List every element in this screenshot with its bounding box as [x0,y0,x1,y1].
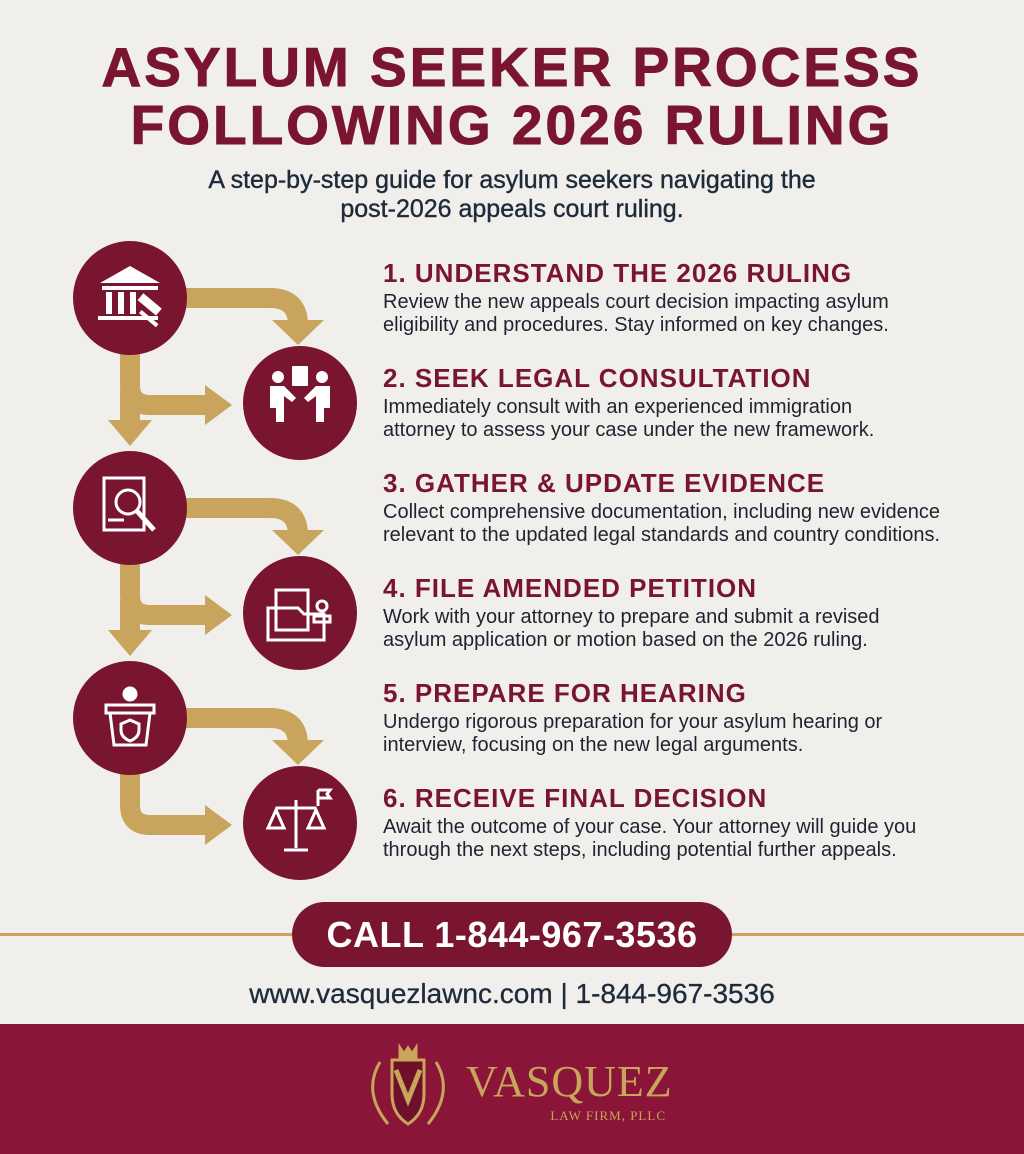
step 5 [383,678,882,756]
step 4: 4. FILE AMENDED PETITION [383,573,757,603]
title: FOLLOWING 2026 RULING [131,94,893,156]
step 3: Collect comprehensive documentation, including new evidence [383,501,940,523]
flow diagram: icons and arrows [73,241,357,880]
step 6: 6. RECEIVE FINAL DECISION [383,783,767,813]
step 6 [383,783,916,861]
step 3: 3. GATHER & UPDATE EVIDENCE [383,468,825,498]
call button: CALL 1-844-967-3536 [326,914,698,955]
step 5: interview, focusing on the new legal arguments. [383,734,803,756]
step 4: asylum application or motion based on the 2026 ruling. [383,629,868,651]
logo text: VASQUEZ [466,1057,673,1106]
call button [292,902,732,967]
icon 6: scales [243,766,357,880]
step 5: Undergo rigorous preparation for your asylum hearing or [383,711,882,733]
icon 4: folder with stamp [243,556,357,670]
step 3 [383,468,940,546]
footer with logo: LAW FIRM, PLLC [550,1108,666,1123]
step 6: through the next steps, including potential further appeals. [383,839,897,861]
step 1: 1. UNDERSTAND THE 2026 RULING [383,258,852,288]
step 2: attorney to assess your case under the new framework. [383,419,874,441]
step 5: 5. PREPARE FOR HEARING [383,678,747,708]
step 4: Work with your attorney to prepare and submit a revised [383,606,880,628]
icon 3: documents search [73,451,187,565]
step 2: 2. SEEK LEGAL CONSULTATION [383,363,812,393]
icon 1: courthouse [73,241,187,355]
icon 5: podium shield [73,661,187,775]
website and phone: www.vasquezlawnc.com | 1-844-967-3536 [249,978,775,1009]
subtitle: A step-by-step guide for asylum seekers navigating the [208,166,816,194]
footer with logo [0,1024,1024,1154]
subtitle: post-2026 appeals court ruling. [340,195,684,223]
step 1: Review the new appeals court decision impacting asylum [383,291,889,313]
step 6: Await the outcome of your case. Your attorney will guide you [383,816,916,838]
step 4 [383,573,880,651]
arrows [130,298,298,825]
title: ASYLUM SEEKER PROCESS [102,36,922,98]
logo crest [371,1043,445,1126]
subtitle [208,166,816,223]
step 2 [383,363,874,441]
step 3: relevant to the updated legal standards and country conditions. [383,524,940,546]
icon 2: consultation [243,346,357,460]
step 1: eligibility and procedures. Stay informed on key changes. [383,314,889,336]
step 2: Immediately consult with an experienced immigration [383,396,852,418]
title [102,36,922,156]
step 1 [383,258,889,336]
